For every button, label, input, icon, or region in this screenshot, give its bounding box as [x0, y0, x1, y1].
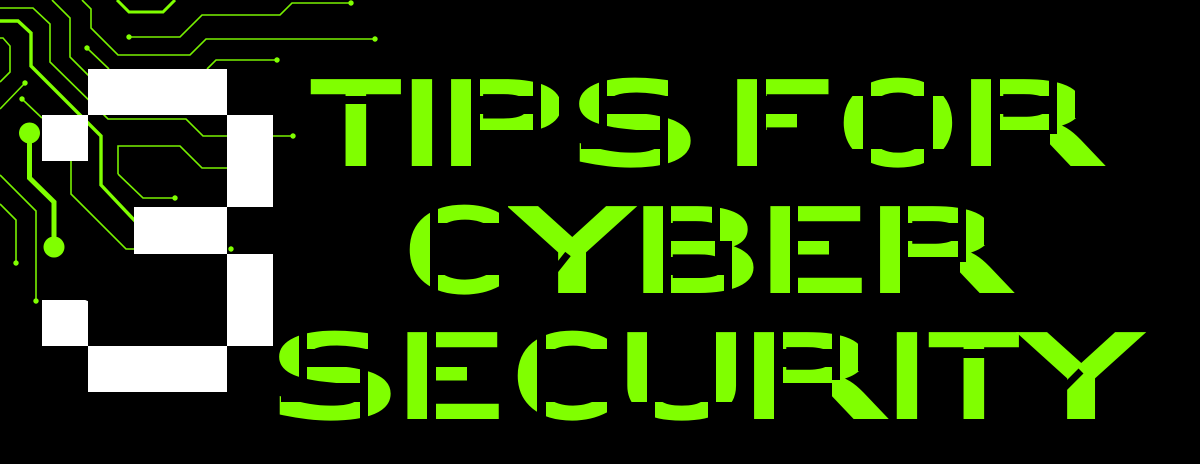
title line: CYBER: R: [865, 188, 1012, 317]
title line: SECURITY: I: [887, 314, 927, 443]
title line: SECURITY: C: [514, 314, 613, 443]
title line: TIPS FOR: I: [402, 61, 442, 190]
title line: SECURITY: R: [739, 314, 886, 443]
title line: SECURITY: T: [932, 314, 1016, 443]
title line: TIPS FOR: R: [956, 61, 1103, 190]
title line: CYBER: B: [630, 188, 762, 317]
stencil gaps: [281, 76, 1110, 422]
title line: SECURITY: E: [395, 314, 505, 443]
circuit board traces: [0, 0, 378, 304]
title line: TIPS FOR: S: [572, 61, 696, 190]
title line: SECURITY: U: [617, 314, 747, 443]
title line: CYBER: Y: [515, 188, 630, 317]
title line: SECURITY: S: [272, 314, 396, 443]
title line: CYBER: E: [758, 188, 868, 317]
title line: TIPS FOR: O: [839, 61, 956, 190]
title line: TIPS FOR: T: [314, 61, 398, 190]
title line: SECURITY: Y: [1024, 314, 1139, 443]
title: [272, 61, 1139, 443]
title line: TIPS FOR: P: [436, 61, 563, 190]
title line: TIPS FOR: F: [724, 61, 834, 190]
title line: CYBER: C: [406, 188, 505, 317]
